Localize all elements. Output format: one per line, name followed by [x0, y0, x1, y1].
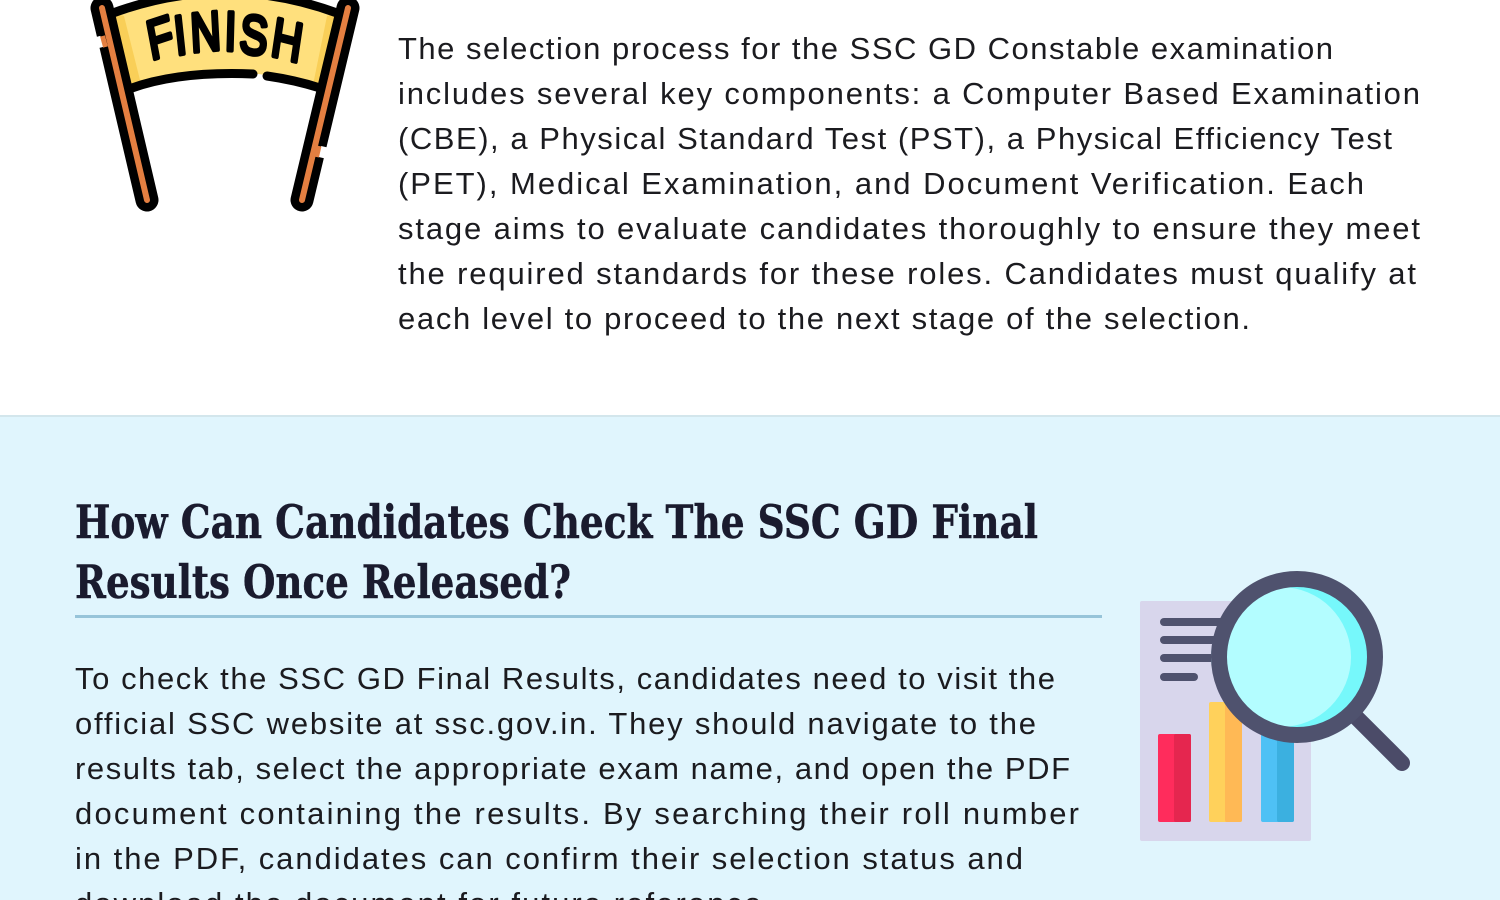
text block: selection process description: The selection process for the SSC GD Constable examination	[398, 31, 1333, 66]
heading	[75, 495, 1038, 609]
text block: how to check results: results tab, select the appropriate exam name, and open the PDF	[75, 751, 1070, 786]
text block: selection process description: the required standards for these roles. Candidates must qualify at	[398, 256, 1416, 291]
text block: selection process description: (PET), Medical Examination, and Document Verification. Each	[398, 166, 1364, 201]
text block: how to check results: To check the SSC GD Final Results, candidates need to visit the	[75, 661, 1055, 696]
text block: how to check results: document containing the results. By searching their roll number	[75, 796, 1079, 831]
icon: finish banner	[96, 0, 348, 200]
text block: selection process description: each level to proceed to the next stage of the selection.	[398, 301, 1250, 336]
right pole	[302, 8, 348, 200]
heading: How Can Candidates Check The SSC GD Final	[75, 495, 1038, 549]
icon: magnifier over report	[1140, 579, 1402, 841]
panel: checking final results	[0, 415, 1500, 900]
text block: selection process description: includes several key components: a Computer Based Examination	[398, 76, 1420, 111]
banner word: FINISH	[142, 1, 306, 75]
panel: selection process	[0, 0, 1500, 416]
left pole	[96, 8, 147, 200]
text block: selection process description: stage aims to evaluate candidates thoroughly to ensure they meet	[398, 211, 1420, 246]
text block: how to check results: in the PDF, candidates can confirm their selection status and	[75, 841, 1023, 876]
text block: selection process description	[398, 31, 1420, 336]
heading: Results Once Released?	[75, 555, 571, 609]
text block: how to check results: official SSC website at ssc.gov.in. They should navigate to the	[75, 706, 1036, 741]
text block: how to check results	[75, 661, 1079, 900]
text block: selection process description: (CBE), a Physical Standard Test (PST), a Physical Efficiency Test	[398, 121, 1392, 156]
